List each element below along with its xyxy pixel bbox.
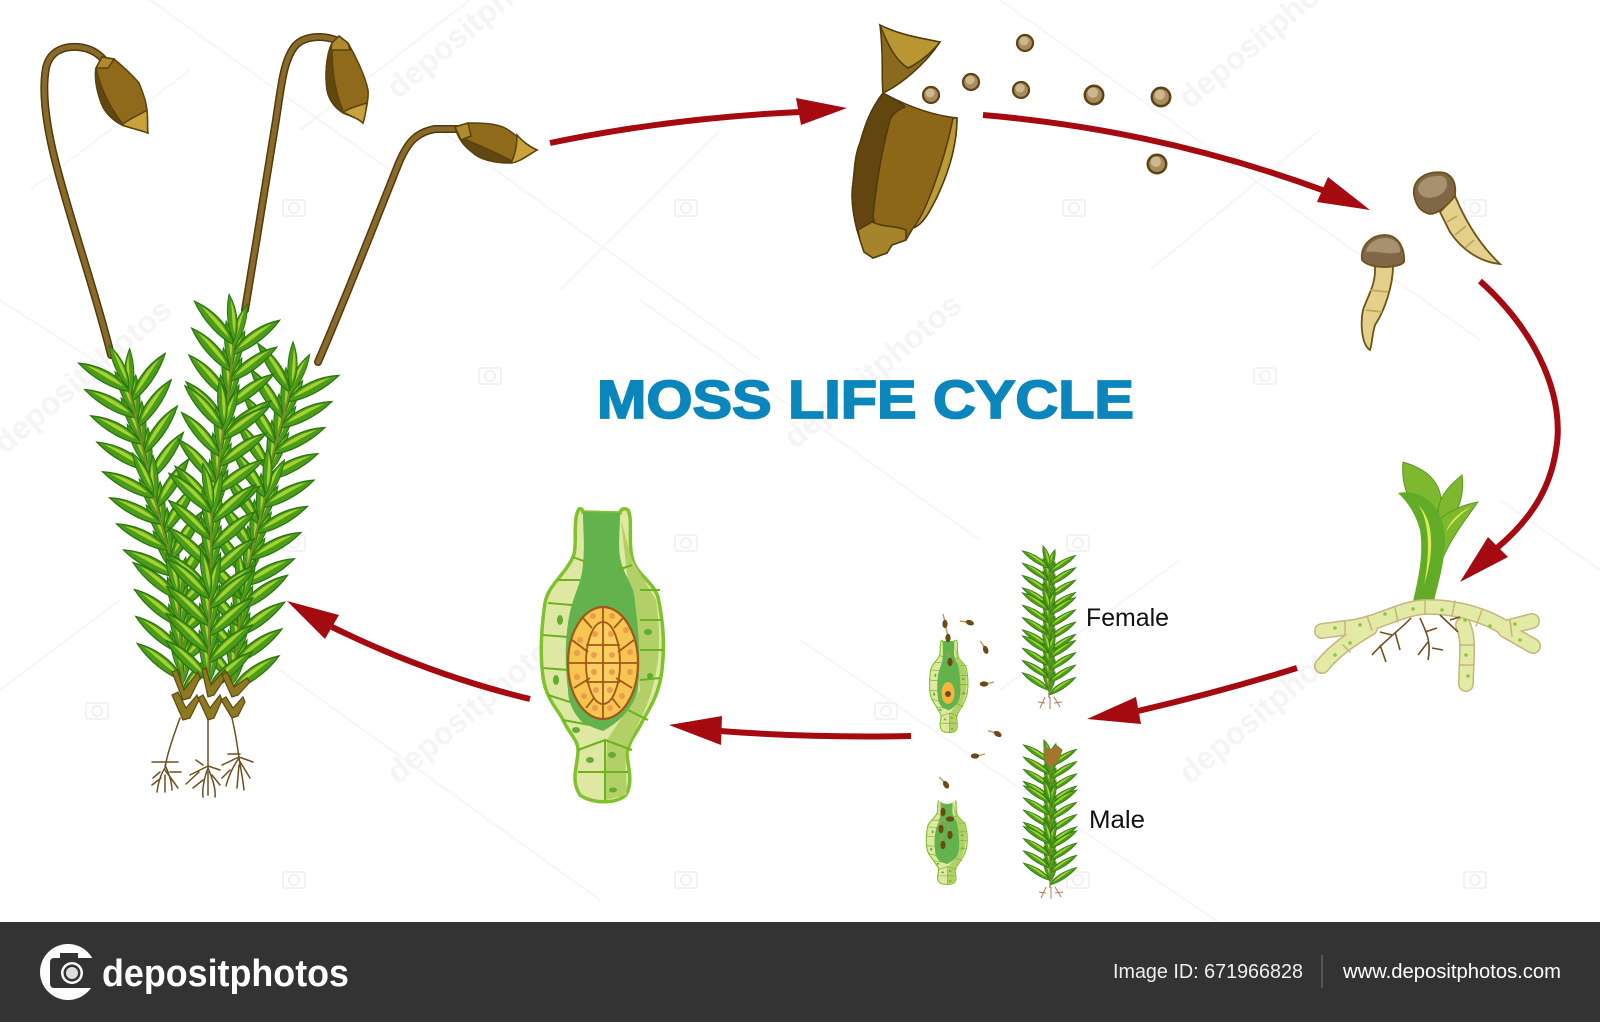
male antheridium small (926, 795, 967, 885)
arrow: capsule to open capsule (550, 98, 847, 143)
male gametophyte (1020, 739, 1080, 899)
left leafy shoot (72, 331, 231, 698)
capsule 2 (326, 36, 368, 123)
capsule lid (880, 25, 940, 93)
spores (923, 35, 1170, 173)
protonema with young shoot (1322, 462, 1533, 684)
watermark: depositphotos (379, 621, 571, 790)
title: MOSS LIFE CYCLE (597, 370, 1134, 430)
logo icon (40, 944, 96, 1000)
opened capsule releasing spores (852, 25, 957, 258)
website: www.depositphotos.com (1342, 961, 1561, 983)
egg cell mass (568, 607, 638, 719)
label: Male: Male (1089, 806, 1145, 834)
arrow: spores to germination (983, 115, 1370, 210)
middle leafy shoot (160, 289, 286, 697)
watermark: depositphotos (1171, 621, 1363, 790)
rhizoids (152, 718, 253, 797)
logo wordmark: depositphotos (102, 953, 349, 995)
germinating spore A (1414, 172, 1500, 264)
right leafy shoot (184, 331, 349, 701)
brown base leaves (172, 668, 250, 720)
capsule body (852, 93, 957, 258)
sporophyte stalks (44, 37, 458, 362)
arrow: archegonium to mature moss (287, 601, 530, 699)
female archegonium small (929, 640, 968, 733)
filament cell dots (1333, 607, 1522, 678)
sperm cells (939, 614, 1003, 790)
arrow: germination to protonema (1460, 281, 1558, 582)
large archegonium with embryo (541, 509, 663, 802)
label: Female: Female (1086, 604, 1169, 632)
image id: Image ID: 671966828 (1113, 961, 1303, 983)
arrow: gametophytes to archegonium (669, 716, 911, 745)
capsule 1 (95, 57, 148, 133)
arrow: protonema to gametophytes (1087, 668, 1297, 724)
germinating spore B (1362, 235, 1404, 350)
young shoot (1398, 462, 1478, 606)
watermark: depositphotos (776, 286, 968, 455)
filaments (1322, 600, 1533, 684)
capsule 3 (455, 123, 537, 163)
female gametophyte (1019, 545, 1079, 709)
mature moss with sporophytes (44, 36, 537, 797)
rhizoids (1372, 615, 1460, 662)
footer bar (0, 922, 1600, 1022)
